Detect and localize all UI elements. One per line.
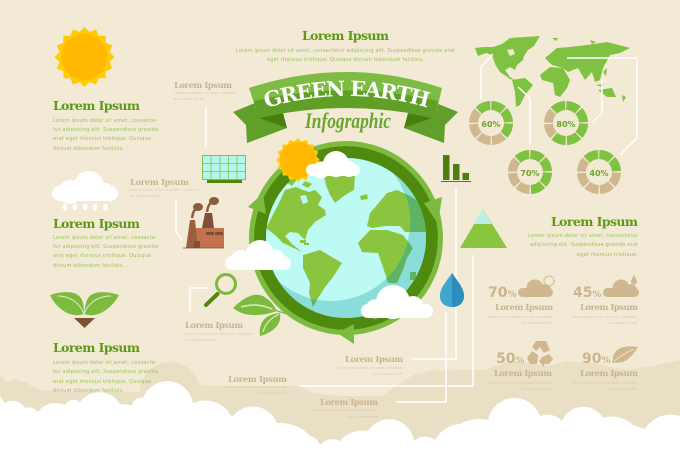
label: solar panel note <box>174 80 237 101</box>
text block: left three <box>53 340 158 394</box>
world map <box>475 36 630 107</box>
subtitle: Infographic <box>304 108 391 133</box>
text block: top centre: Lorem Ipsum <box>302 28 389 43</box>
cloud: bottom right of globe <box>361 285 433 319</box>
stat: 50 percent: tur adipiscing elit. <box>521 387 552 391</box>
text block: left one: Lorem ipsum dolor sit amet, consecte- <box>53 118 157 124</box>
icon: leaves <box>233 295 290 336</box>
text block: left two: tur adipiscing elit. Suspendisse gravida <box>53 244 158 250</box>
label: bottom note three: Lorem ipsum dolor sit amet, consecte- <box>313 408 379 412</box>
text block: left three: tur adipiscing elit. Suspendisse gravida <box>53 369 158 375</box>
stat: 45 percent <box>573 275 639 325</box>
stat: 45 percent: 45% <box>573 285 602 301</box>
donut: 70 percent: 70% <box>520 169 540 178</box>
stat: 50 percent: Lorem ipsum dolor sit amet, consecte- <box>487 381 553 385</box>
icon: rain cloud <box>52 171 118 210</box>
text block: left one <box>53 98 158 152</box>
text block: left two: Lorem ipsum dolor sit amet, consecte- <box>53 235 157 241</box>
icon: mountain <box>460 209 507 248</box>
text block: right <box>528 214 639 258</box>
text block: left one: Lorem Ipsum <box>53 98 140 113</box>
icon: factory <box>183 197 224 248</box>
ribbon band <box>249 72 442 118</box>
text block: left three: Lorem Ipsum <box>53 340 140 355</box>
label: solar panel note: tur adipiscing elit. <box>174 97 206 101</box>
stat: 70 percent <box>488 276 554 325</box>
ring <box>252 144 440 332</box>
label: bottom note two: Lorem Ipsum <box>228 374 287 384</box>
label: magnifier note: Lorem Ipsum <box>185 320 243 330</box>
label: magnifier note: tur adipiscing elit. <box>185 338 217 342</box>
text block: right: Lorem ipsum dolor sit amet, consectetur <box>528 233 639 239</box>
text block: top centre <box>236 28 455 63</box>
text block: left three: dictum bibendum facilisis. <box>53 388 124 394</box>
cloud: left of globe <box>225 240 291 270</box>
label: bottom note one: tur adipiscing elit. <box>372 372 403 376</box>
stat: 90 percent: 90% <box>582 351 611 367</box>
icon: sun <box>55 27 114 87</box>
label: factory note: tur adipiscing elit. <box>130 194 162 198</box>
text block: left three: erat eget rhoncus tristique. Quisque <box>53 379 151 385</box>
ring arrowheads <box>248 193 442 344</box>
label: factory note: Lorem ipsum dolor sit amet, consecte- <box>130 188 200 192</box>
text block: left two <box>53 216 158 269</box>
text block: left one: tur adipiscing elit. Suspendisse gravida <box>53 127 158 133</box>
map connector lines <box>481 54 637 155</box>
label: magnifier note <box>185 320 255 342</box>
globe <box>266 158 426 318</box>
text block: left three: Lorem ipsum dolor sit amet, consecte- <box>53 360 157 366</box>
label: bottom note two: tur adipiscing elit. <box>256 391 287 395</box>
stat: 45 percent: tur adipiscing elit. <box>607 321 638 325</box>
donut: 40 percent <box>574 147 624 197</box>
title: GREEN EARTH <box>264 80 430 108</box>
text block: top centre: Lorem ipsum dolor sit amet, consectetur adipiscing elit. Suspendisse gravida erat <box>236 48 455 54</box>
foreground clouds: white <box>0 381 680 453</box>
text block: left one: dictum bibendum facilisis. <box>53 146 124 152</box>
icon: cloud with sun <box>518 276 554 297</box>
icon: globe with recycling ring <box>225 138 442 344</box>
label: solar panel note: Lorem ipsum dolor sit amet, consecte- <box>174 91 237 95</box>
label: factory note: Lorem Ipsum <box>130 177 189 187</box>
text block: left two: dictum bibendum facilisis. <box>53 263 124 269</box>
stat: 50 percent: Lorem Ipsum <box>494 368 552 378</box>
label: bottom note three: tur adipiscing elit. <box>347 415 378 419</box>
icon: recycle <box>527 341 553 367</box>
label: bottom note one <box>338 354 404 376</box>
icon: bar chart <box>441 155 471 182</box>
title ribbon <box>233 72 458 143</box>
text block: left two: erat eget rhoncus tristique. Quisque <box>53 253 151 259</box>
label: bottom note two: Lorem ipsum dolor sit amet, consecte- <box>222 385 288 389</box>
donut: 70 percent <box>505 147 555 197</box>
icon: leaf <box>612 346 638 363</box>
text block: right: adipiscing elit. Suspendisse gravida erat <box>530 242 638 248</box>
text block: right: eget rhoncus tristique. <box>577 252 638 258</box>
stat: 45 percent: Lorem ipsum dolor sit amet, consecte- <box>573 315 639 319</box>
label: bottom note two <box>222 374 288 395</box>
text block: right: Lorem Ipsum <box>551 214 638 229</box>
white connector lines <box>176 107 473 402</box>
text block: left two: Lorem Ipsum <box>53 216 140 231</box>
text block: top centre: eget rhoncus tristique. Quisque dictum bibendum facilisis. <box>267 57 424 63</box>
stat: 70 percent: tur adipiscing elit. <box>522 321 553 325</box>
stat: 90 percent: Lorem ipsum dolor sit amet, consecte- <box>573 381 639 385</box>
label: bottom note one: Lorem ipsum dolor sit amet, consecte- <box>338 366 404 370</box>
stat: 70 percent: Lorem ipsum dolor sit amet, consecte- <box>488 315 554 319</box>
stat: 70 percent: 70% <box>488 285 517 301</box>
icon: sprout <box>50 292 119 328</box>
ribbon tails <box>233 103 458 143</box>
label: magnifier note: Lorem ipsum dolor sit amet, consecte- <box>185 332 255 336</box>
cloud: over globe top <box>306 151 360 178</box>
stat: 70 percent: Lorem Ipsum <box>495 302 553 312</box>
icon: magnifier <box>206 274 236 305</box>
stat: 90 percent: tur adipiscing elit. <box>607 387 638 391</box>
donut: 60 percent: 60% <box>481 120 501 129</box>
stat: 90 percent <box>573 346 639 391</box>
label: bottom note three <box>313 397 379 419</box>
stat: 50 percent <box>487 341 553 391</box>
label: factory note <box>130 177 200 198</box>
label: bottom note one: Lorem Ipsum <box>345 354 403 364</box>
icon: solar panel <box>202 155 246 183</box>
label: solar panel note: Lorem Ipsum <box>174 80 232 90</box>
icon: cloud with drop <box>603 275 639 297</box>
background clouds: tan layer <box>0 360 680 453</box>
small sun <box>276 138 320 182</box>
donut: 40 percent: 40% <box>589 169 609 178</box>
donut: 60 percent <box>466 98 516 148</box>
text block: left one: erat eget rhoncus tristique. Quisque <box>53 136 151 142</box>
donut: 80 percent <box>541 98 591 148</box>
stat: 45 percent: Lorem Ipsum <box>580 302 638 312</box>
stat: 90 percent: Lorem Ipsum <box>580 368 638 378</box>
stat: 50 percent: 50% <box>496 351 525 367</box>
label: bottom note three: Lorem Ipsum <box>320 397 378 407</box>
donut: 80 percent: 80% <box>556 120 576 129</box>
icon: water drop <box>440 273 464 307</box>
